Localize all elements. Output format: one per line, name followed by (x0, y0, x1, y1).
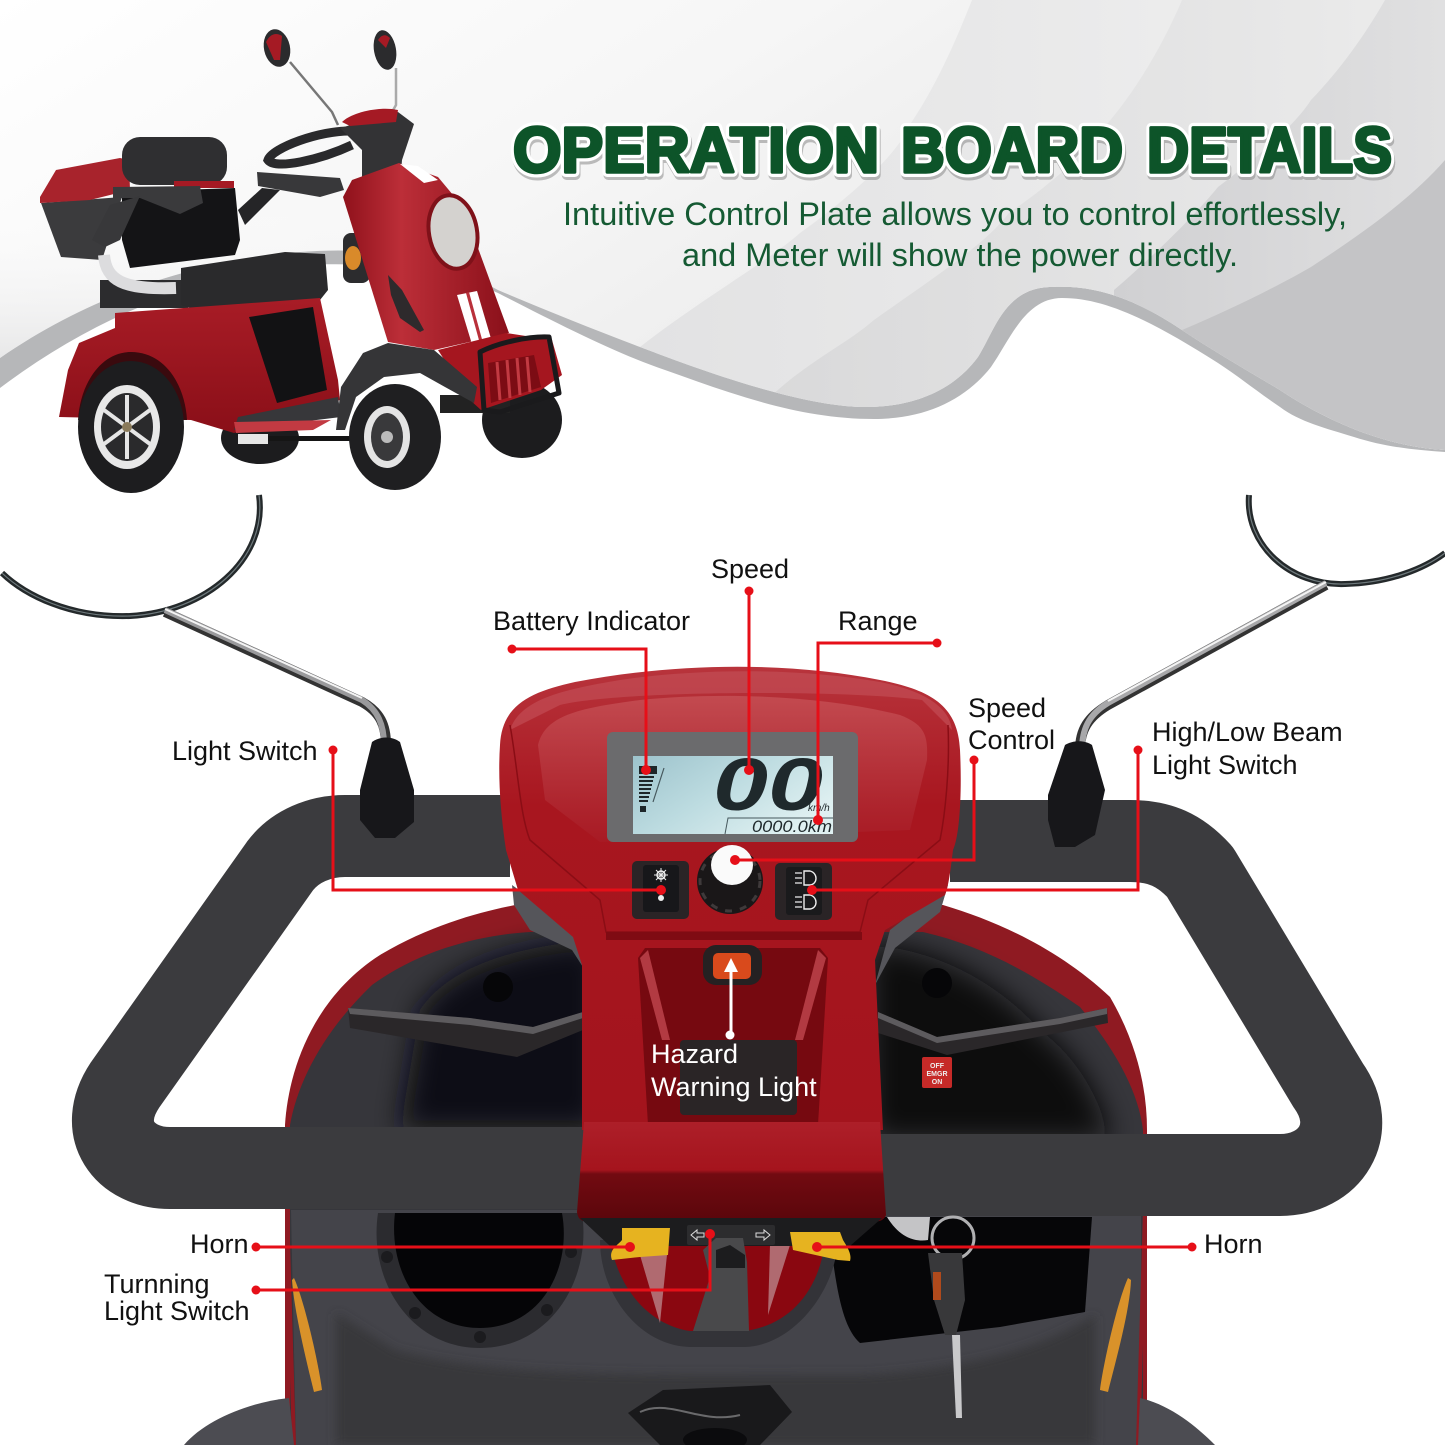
callout: right horn (812, 1229, 1263, 1259)
callout: turning light switch: Turnning (104, 1269, 210, 1299)
battery bars (639, 766, 657, 812)
callout: speed control: Speed (968, 693, 1046, 723)
shell rim (285, 905, 1147, 1445)
left horn button (611, 1228, 670, 1260)
scooter product photo (40, 27, 562, 493)
holes (483, 972, 513, 1002)
right red edge (1136, 1210, 1147, 1445)
mirror cables and arms (2, 495, 1445, 750)
title shadow: BOARD (902, 117, 1124, 189)
ignition key (887, 1217, 974, 1418)
bottom centre knob (628, 1385, 792, 1445)
callout: speed: Speed (711, 554, 789, 584)
background wave (0, 0, 1445, 452)
odometer: 0000.0km (752, 817, 832, 836)
title fill: BOARD (901, 114, 1123, 186)
subtitle (563, 196, 1347, 273)
bottom right foot (1138, 1398, 1215, 1445)
console side flanks (512, 885, 588, 975)
right horn button (790, 1232, 851, 1261)
emergency sticker (922, 1057, 952, 1088)
callout: light switch: Light Switch (172, 736, 318, 766)
red recess (610, 1240, 825, 1331)
gray ring around recess (600, 1240, 838, 1347)
wave rim (0, 0, 1445, 452)
scooter steering (268, 109, 414, 283)
LCD meter (607, 732, 858, 842)
console contour lines (510, 725, 948, 932)
scooter tiller body (343, 163, 509, 364)
cup holder (377, 1213, 583, 1348)
key compartment (832, 1217, 1092, 1343)
subtitle: and Meter will show the power directly. (682, 237, 1238, 273)
scooter backrest (122, 137, 227, 185)
speed control knob (697, 845, 763, 914)
handlebar (113, 836, 1341, 1175)
bottom left foot (184, 1398, 294, 1445)
subtitle: Intuitive Control Plate allows you to control effortlessly, (563, 196, 1347, 232)
title shadow: OPERATION (514, 117, 880, 189)
title shadow: DETAILS (1148, 117, 1393, 189)
scooter rear wheel (78, 361, 184, 493)
title (513, 114, 1393, 189)
bottom switch housing (580, 1218, 882, 1347)
title shadow (514, 117, 1393, 189)
turn signal switch (687, 1225, 775, 1331)
left reflector (292, 1278, 322, 1392)
title outline: BOARD (901, 114, 1123, 186)
hazard warning button (703, 945, 762, 985)
right lever (878, 1008, 1108, 1055)
scooter front bumper panel (438, 333, 562, 412)
title fill: OPERATION (513, 114, 879, 186)
title outline: OPERATION (513, 114, 879, 186)
console recess (638, 948, 828, 1125)
emergency sticker: OFF (930, 1063, 945, 1070)
title outline (513, 114, 1392, 186)
callout: turning light switch: Light Switch (104, 1296, 250, 1326)
callout: left horn (190, 1229, 635, 1259)
recess label plate (680, 1040, 797, 1115)
right mirror cable (1249, 495, 1445, 584)
scooter seat frame (92, 172, 344, 268)
light switch (632, 861, 689, 919)
scooter seat (100, 252, 328, 308)
callout: speed (711, 554, 789, 775)
title outline: DETAILS (1147, 114, 1392, 186)
callout: hazard warning light: Warning Light (651, 1072, 817, 1102)
recess highlights (640, 950, 826, 1040)
callout: range: Range (838, 606, 918, 636)
scooter mirrors (260, 27, 399, 125)
callout: high low beam light switch: Light Switch (1152, 750, 1298, 780)
console lower divider (606, 932, 862, 940)
emergency sticker: EMGR (926, 1071, 948, 1078)
callout: right horn: Horn (1204, 1229, 1263, 1259)
control console (499, 667, 961, 1222)
right reflector (1100, 1278, 1131, 1392)
left mirror arm (165, 609, 386, 745)
callout: high low beam light switch: High/Low Beam (1152, 717, 1343, 747)
tray interior (290, 932, 1143, 1445)
emergency sticker: ON (932, 1079, 942, 1086)
callout: speed control: Control (968, 725, 1055, 755)
callout: light switch (172, 736, 666, 895)
callout: range (813, 606, 942, 825)
callout: hazard warning light (651, 958, 817, 1102)
left red edge (285, 1210, 296, 1445)
left lever (348, 1008, 583, 1057)
right mirror arm (1080, 582, 1326, 750)
callout: hazard warning light: Hazard (651, 1039, 738, 1069)
far wheels (221, 382, 562, 464)
lower console block (577, 1122, 886, 1222)
scooter headlight (423, 191, 483, 273)
callout: turning light switch (104, 1229, 715, 1326)
callout: battery indicator (493, 606, 690, 775)
speed digits: 00 (713, 743, 823, 826)
left mirror base (360, 738, 414, 838)
scooter body (59, 298, 358, 444)
scooter body shell (184, 905, 1215, 1445)
scooter front fender (336, 343, 477, 430)
callout: battery indicator: Battery Indicator (493, 606, 690, 636)
callout: speed control (730, 693, 1055, 865)
high low beam switch (775, 863, 832, 920)
callout: left horn: Horn (190, 1229, 249, 1259)
callout: high low beam light switch (807, 717, 1343, 895)
scooter front wheel (349, 384, 441, 490)
lower body surface (291, 1210, 1141, 1445)
right mirror base (1048, 741, 1105, 847)
speed unit: km/h (808, 803, 830, 814)
left mirror cable (2, 495, 260, 616)
title fill: DETAILS (1147, 114, 1392, 186)
console body (499, 667, 961, 1130)
scooter rear box (40, 158, 130, 260)
title fill (513, 114, 1392, 186)
